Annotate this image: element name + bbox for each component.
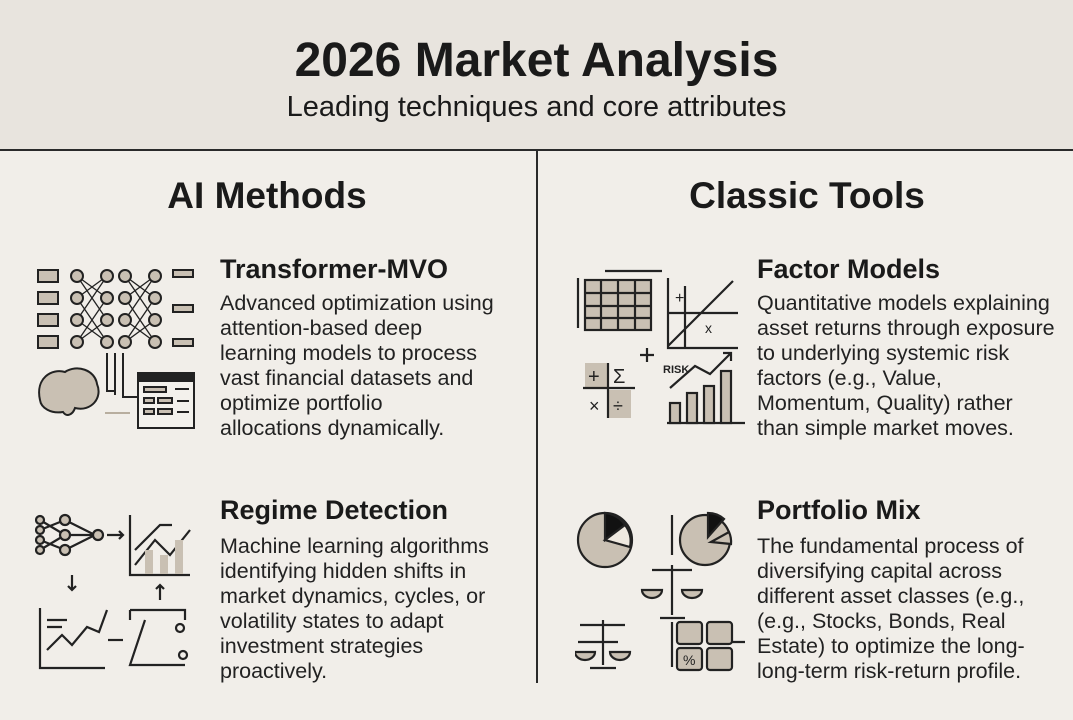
text: volatility states to adapt	[220, 609, 443, 633]
text: allocations dynamically.	[220, 416, 444, 440]
text: Transformer-MVO	[220, 254, 448, 284]
text: learning models to process	[220, 341, 477, 365]
text: attention-based deep	[220, 316, 422, 340]
text: market dynamics, cycles, or	[220, 584, 485, 608]
icon: portfolio mix: %	[683, 652, 695, 668]
text: Estate) to optimize the long-	[757, 634, 1025, 658]
icon: portfolio mix	[575, 512, 745, 672]
text: factors (e.g., Value,	[757, 366, 942, 390]
text: Advanced optimization using	[220, 291, 494, 315]
item: Factor Models	[757, 254, 1055, 440]
heading: AI Methods: AI Methods	[167, 175, 367, 216]
text: investment strategies	[220, 634, 423, 658]
text: long-term risk-return profile.	[757, 659, 1021, 683]
icon: factor models	[576, 270, 745, 424]
icon: factor models: ×	[589, 396, 600, 416]
icon: factor models: Σ	[613, 366, 625, 388]
icon: neural network & brain	[37, 269, 195, 429]
item: Portfolio Mix	[757, 495, 1025, 683]
icon: factor models: +	[675, 290, 684, 307]
text: Factor Models	[757, 254, 940, 284]
heading: Classic Tools: Classic Tools	[689, 175, 925, 216]
text: vast financial datasets and	[220, 366, 473, 390]
text: Regime Detection	[220, 495, 448, 525]
text: Quantitative models explaining	[757, 291, 1050, 315]
text: identifying hidden shifts in	[220, 559, 466, 583]
text: than simple market moves.	[757, 416, 1014, 440]
title: 2026 Market Analysis	[295, 34, 778, 87]
text: diversifying capital across	[757, 559, 1002, 583]
header band	[0, 0, 1073, 151]
text: Machine learning algorithms	[220, 534, 489, 558]
text: proactively.	[220, 659, 327, 683]
icon: factor models: +	[588, 366, 600, 388]
icon: factor models: RISK	[663, 364, 689, 376]
text: The fundamental process of	[757, 534, 1024, 558]
text: optimize portfolio	[220, 391, 383, 415]
icon: regime detection	[35, 514, 191, 670]
text: asset returns through exposure	[757, 316, 1055, 340]
text: different asset classes (e.g.,	[757, 584, 1024, 608]
text: Momentum, Quality) rather	[757, 391, 1013, 415]
item: Transformer-MVO	[220, 254, 494, 440]
item: Regime Detection	[220, 495, 489, 683]
icon: factor models: ÷	[613, 396, 623, 416]
text: (e.g., Stocks, Bonds, Real	[757, 609, 1006, 633]
text: Portfolio Mix	[757, 495, 920, 525]
text: to underlying systemic risk	[757, 341, 1009, 365]
icon: factor models: x	[705, 320, 712, 336]
subtitle: Leading techniques and core attributes	[287, 91, 786, 123]
